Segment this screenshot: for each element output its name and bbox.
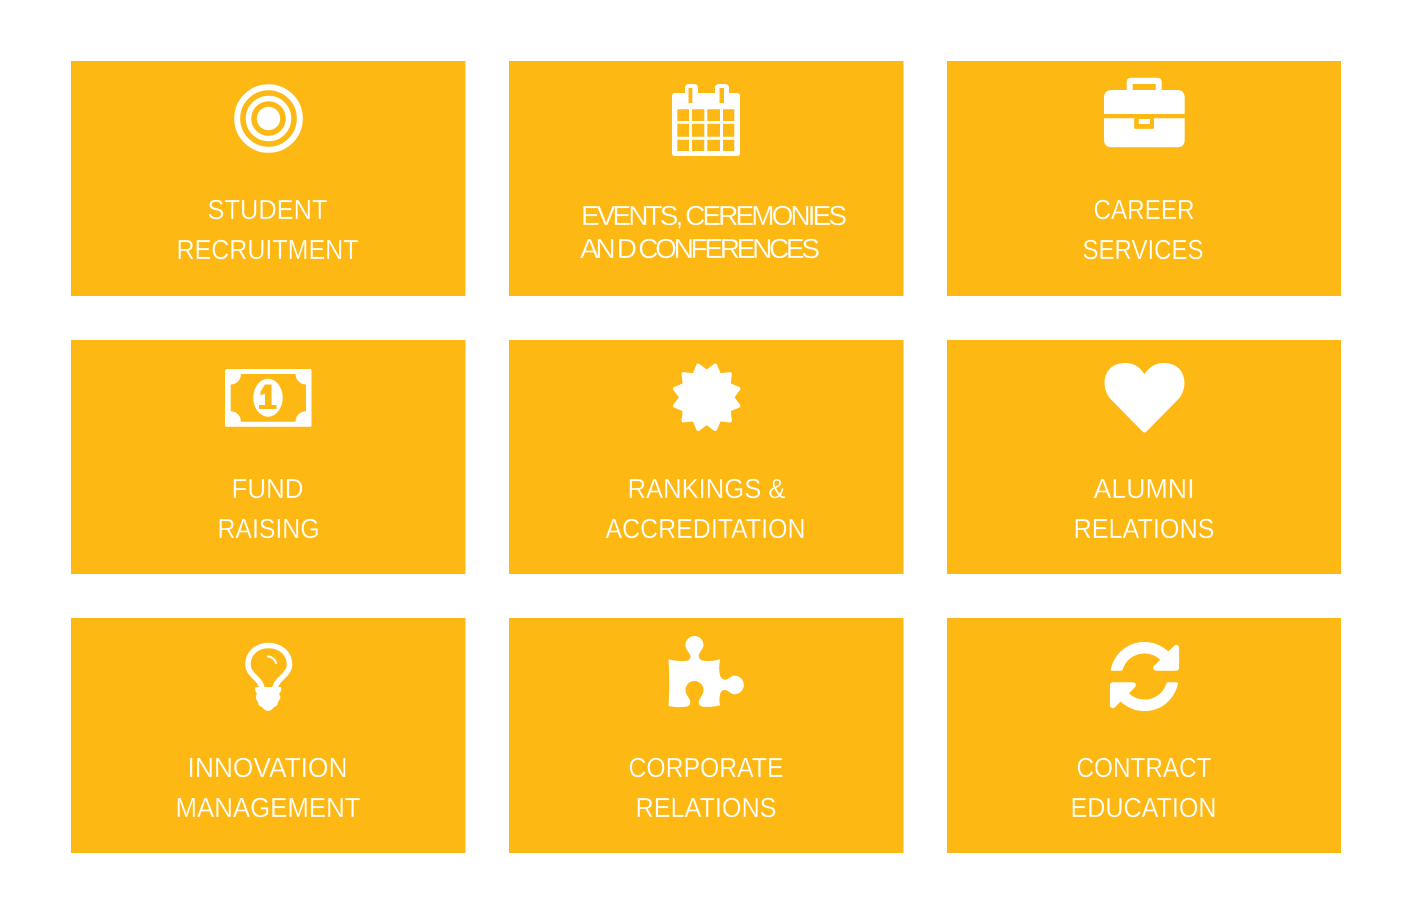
panel: corporate relations (509, 618, 904, 853)
label: innovation management (176, 752, 360, 823)
label: career services: CAREER (1094, 194, 1194, 225)
label: student recruitment: STUDENT (208, 194, 328, 225)
label: fund raising: RAISING (218, 513, 320, 544)
label: events, ceremonies and conferences: EVENTS, CEREMONIES (581, 200, 847, 231)
label: career services: SERVICES (1082, 234, 1204, 265)
icon: briefcase (1104, 78, 1185, 147)
icon: calendar (672, 84, 740, 156)
label: career services (1082, 194, 1204, 265)
panel: innovation management (71, 618, 466, 853)
label: fund raising: FUND (232, 473, 304, 504)
label: rankings and accreditation (606, 473, 806, 544)
panel: events, ceremonies and conferences (509, 61, 904, 296)
icon: target (237, 87, 300, 150)
label: contract education: CONTRACT (1076, 752, 1212, 783)
label: innovation management: INNOVATION (188, 752, 348, 783)
panel: student recruitment (71, 61, 466, 296)
icon: light bulb (248, 646, 290, 711)
label: contract education: EDUCATION (1070, 792, 1216, 823)
panel: alumni relations (947, 340, 1341, 574)
icon: seal badge (673, 364, 740, 431)
panel: contract education (947, 618, 1341, 853)
label: innovation management: MANAGEMENT (176, 792, 360, 823)
panel: fund raising (71, 340, 466, 574)
icon: refresh arrows (1110, 642, 1179, 711)
label: rankings and accreditation: RANKINGS & (628, 473, 786, 504)
label: student recruitment: RECRUITMENT (176, 234, 358, 265)
panel: rankings and accreditation (509, 340, 904, 574)
icon: heart (1105, 363, 1184, 432)
label: fund raising (218, 473, 320, 544)
label: alumni relations (1074, 473, 1214, 544)
label: events, ceremonies and conferences: AN D CONFERENCES (580, 233, 820, 264)
label: corporate relations (628, 752, 784, 823)
panel: career services (947, 61, 1341, 296)
label: alumni relations: RELATIONS (1074, 513, 1214, 544)
label: corporate relations: RELATIONS (636, 792, 776, 823)
label: alumni relations: ALUMNI (1094, 473, 1194, 504)
label: student recruitment (176, 194, 358, 265)
label: contract education (1070, 752, 1216, 823)
icon: puzzle piece (668, 636, 744, 707)
label: events, ceremonies and conferences (580, 200, 847, 264)
label: corporate relations: CORPORATE (628, 752, 784, 783)
icon: banknote (225, 369, 312, 427)
label: rankings and accreditation: ACCREDITATION (606, 513, 806, 544)
